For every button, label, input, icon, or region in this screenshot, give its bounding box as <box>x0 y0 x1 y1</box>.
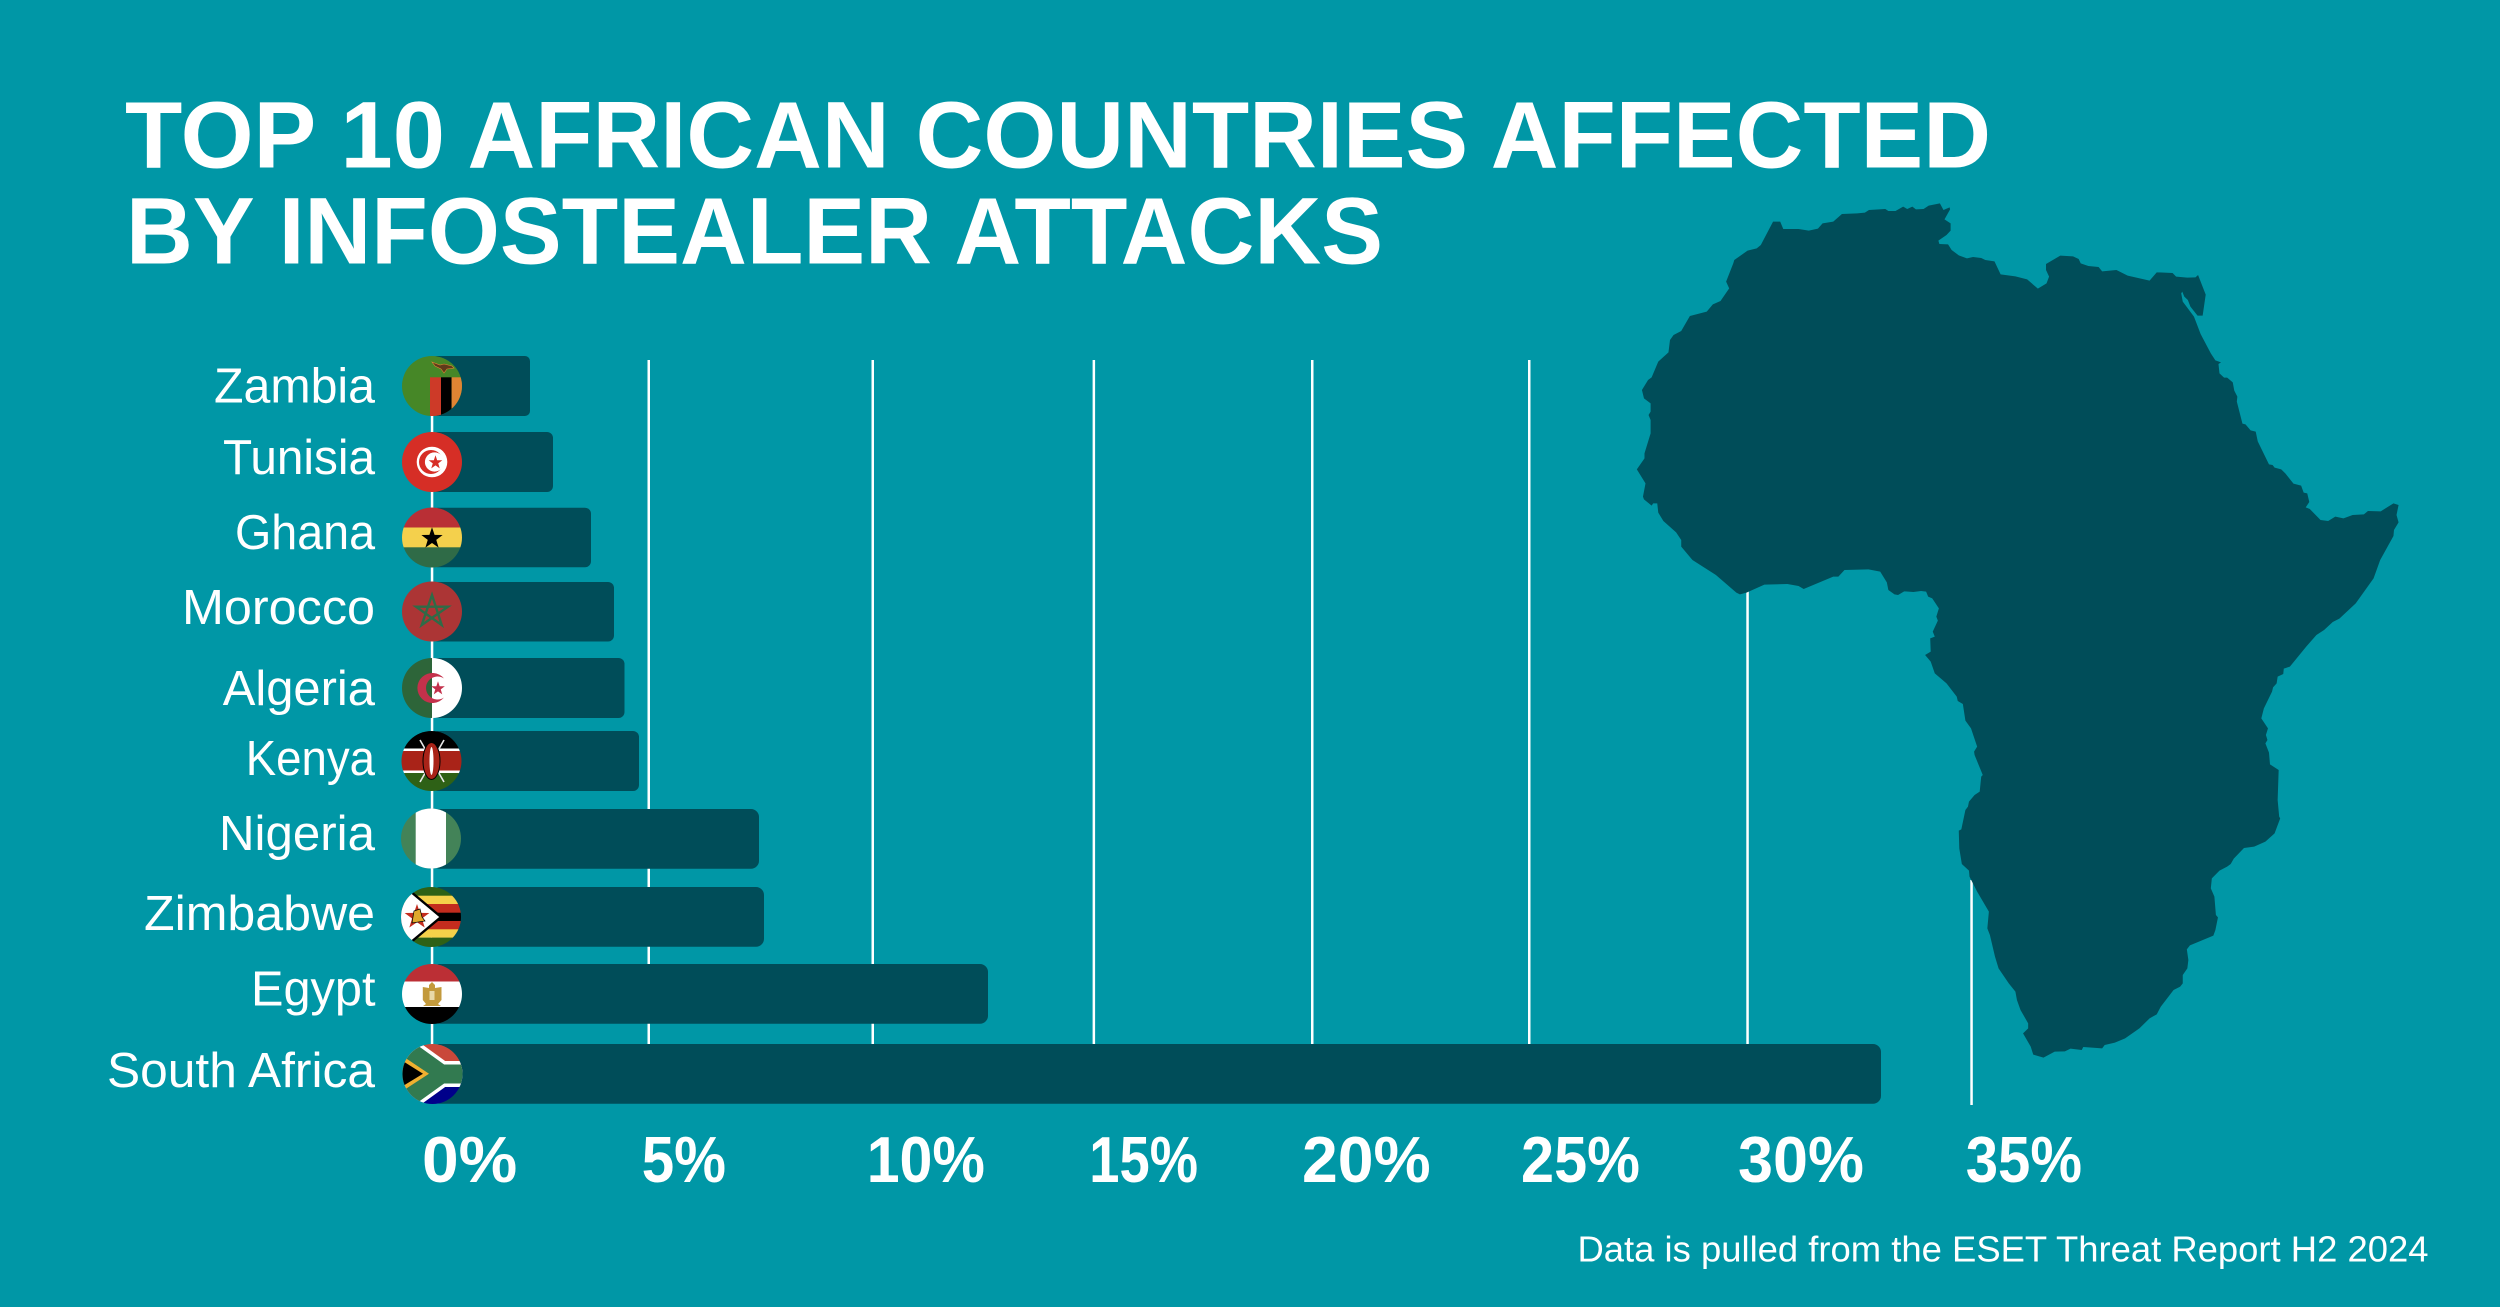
country labels: Nigeria <box>219 807 376 861</box>
country labels: Ghana <box>235 506 376 560</box>
country labels: Morocco <box>182 581 375 635</box>
country labels: Tunisia <box>223 431 376 485</box>
axis labels: 25% <box>1521 1123 1640 1196</box>
flag: Ghana <box>402 508 462 568</box>
country labels: Egypt <box>251 963 376 1017</box>
country labels: Algeria <box>223 662 376 716</box>
bar chart <box>432 356 1881 1104</box>
bar: Tunisia <box>432 432 553 492</box>
country labels: Kenya <box>246 732 376 786</box>
title: BY INFOSTEALER ATTACKS <box>126 178 1383 284</box>
axis labels: 5% <box>642 1123 726 1196</box>
flag: Algeria <box>402 658 462 718</box>
bar: Morocco <box>432 582 614 642</box>
bar: South Africa <box>432 1044 1881 1104</box>
source note: Data is pulled from the ESET Threat Report H2 2024 <box>1578 1229 2428 1270</box>
axis labels: 10% <box>867 1123 985 1196</box>
flag: Zambia <box>402 356 462 416</box>
title: TOP 10 AFRICAN COUNTRIES AFFECTED <box>125 82 1991 188</box>
flag: South Africa <box>402 1044 462 1104</box>
bar: Zimbabwe <box>432 887 764 947</box>
country labels: Zimbabwe <box>144 887 375 941</box>
flag: Tunisia <box>402 432 462 492</box>
title <box>125 82 1991 284</box>
flag: Kenya <box>402 731 462 791</box>
bar: Zambia <box>432 356 530 416</box>
axis labels <box>422 1123 2082 1196</box>
country labels <box>107 360 376 1098</box>
bar: Egypt <box>432 964 988 1024</box>
country labels: Zambia <box>214 360 376 414</box>
axis labels: 15% <box>1089 1123 1198 1196</box>
flag: Egypt <box>402 964 462 1024</box>
bar: Kenya <box>432 731 639 791</box>
flag: Zimbabwe <box>401 887 461 947</box>
axis labels: 20% <box>1302 1123 1431 1196</box>
bar: Nigeria <box>432 809 759 869</box>
bar: Ghana <box>432 508 591 567</box>
axis labels: 0% <box>422 1123 517 1196</box>
flag: Morocco <box>402 582 462 642</box>
country labels: South Africa <box>107 1044 376 1098</box>
axis labels: 30% <box>1738 1123 1864 1196</box>
axis labels: 35% <box>1966 1123 2082 1196</box>
bar: Algeria <box>432 658 624 718</box>
flag: Nigeria <box>401 808 461 868</box>
map of Africa <box>1637 203 2399 1058</box>
